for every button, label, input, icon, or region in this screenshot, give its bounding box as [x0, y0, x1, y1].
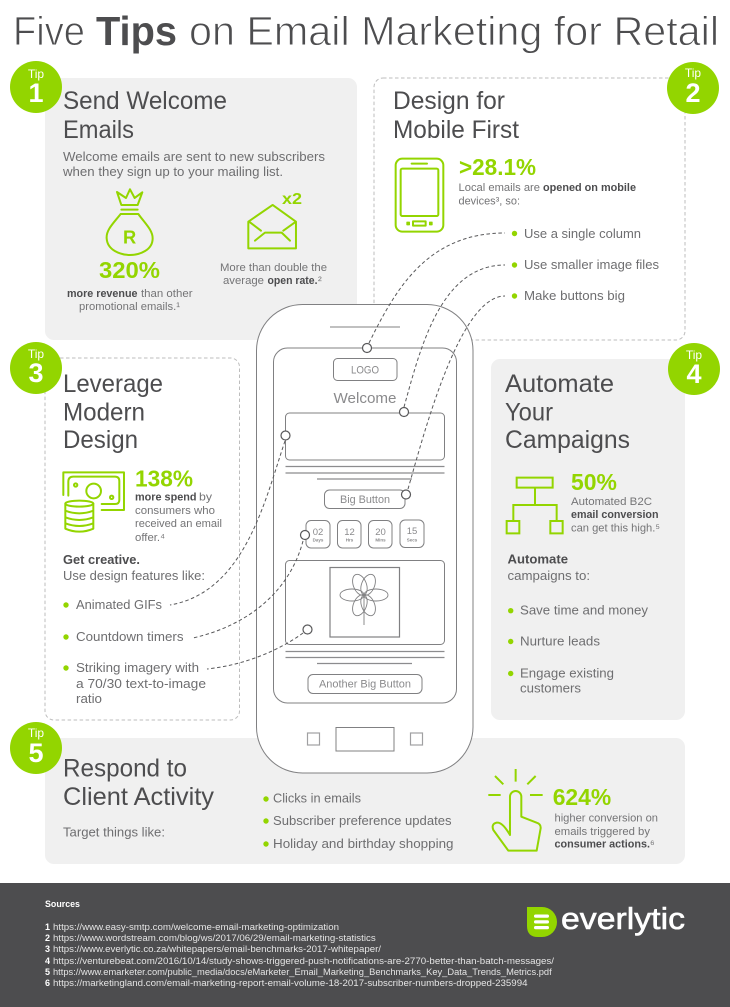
icon: money bag with crown: R	[123, 226, 136, 247]
list: client triggers	[263, 791, 454, 851]
badge: tip 3	[10, 342, 62, 394]
list: automation benefits: Save time and money	[520, 602, 649, 618]
list: automation benefits: Engage existing	[520, 666, 614, 681]
icon: open envelope x2	[248, 191, 302, 248]
sources list: https://marketingland.com/email-marketing-report-email-volume-18-2017-subscriber-numbers-dropped-235994	[53, 978, 528, 988]
list: mobile tips: Make buttons big	[524, 288, 625, 303]
sources list: 5	[45, 967, 50, 977]
text: opened on mobile: Local emails are	[458, 182, 540, 194]
list: mobile tips: Use smaller image files	[524, 257, 660, 272]
panel: tip 3 leverage modern design	[45, 358, 240, 720]
big button	[324, 490, 405, 508]
countdown timer: 02	[313, 527, 323, 538]
panel: tip 4 automate your campaigns	[491, 359, 685, 720]
text: email conversion: Automated B2C	[571, 496, 652, 508]
logo: everlytic	[527, 901, 685, 937]
text: more spend: by	[199, 492, 212, 504]
countdown timer: Secs	[407, 538, 418, 542]
icon: workflow chart	[507, 478, 563, 533]
icon: tapping hand	[488, 769, 543, 851]
heading: leverage modern design: Design	[63, 426, 138, 454]
list: design features: ratio	[76, 691, 102, 706]
text: opened on mobile	[458, 182, 636, 208]
list: client triggers: Clicks in emails	[273, 791, 361, 806]
stat: 624%: 624%	[553, 784, 611, 810]
badge: tip 2: Tip	[685, 66, 701, 80]
dashed connectors	[170, 233, 505, 669]
heading: design for mobile first: Mobile First	[393, 116, 519, 144]
countdown timer: Mins	[375, 538, 386, 542]
heading: respond to client activity: Client Activity	[63, 783, 214, 811]
sources list: 6	[45, 978, 50, 988]
heading: automate your campaigns: Automate	[505, 370, 614, 398]
text: more revenue: promotional emails.¹	[79, 301, 180, 313]
badge: tip 1: 1	[28, 78, 44, 108]
text: more spend: offer.⁴	[135, 532, 165, 544]
badge: tip 1	[10, 61, 62, 113]
image box with flower	[286, 560, 444, 644]
sources list: https://www.easy-smtp.com/welcome-email-marketing-optimization	[53, 922, 339, 932]
title: on Email Marketing for Retail	[189, 8, 719, 54]
badge: tip 4: Tip	[686, 348, 702, 362]
sources list: https://www.everlytic.co.za/whitepapers/email-benchmarks-2017-whitepaper/	[53, 944, 382, 954]
stat: 50%: 50%	[571, 469, 617, 495]
list: client triggers: Subscriber preference updates	[273, 813, 452, 828]
heading: automate your campaigns: Campaigns	[505, 426, 630, 454]
list: automation benefits: Nurture leads	[520, 634, 601, 648]
list: mobile tips	[512, 226, 660, 303]
sources list: 4	[45, 956, 50, 966]
list: mobile tips: Use a single column	[524, 226, 641, 241]
text: higher conversion: emails triggered by	[554, 826, 650, 838]
text: welcome description: Welcome emails are sent to new subscribers	[63, 149, 326, 164]
badge: tip 3: Tip	[28, 347, 44, 361]
countdown timer	[306, 520, 424, 548]
text: welcome description	[62, 149, 326, 179]
text: more revenue	[67, 288, 193, 313]
countdown timer: Hrs	[346, 538, 354, 542]
icon: money bag with crown	[107, 189, 153, 255]
hero image box	[286, 413, 444, 460]
text: more spend: more spend	[135, 492, 197, 504]
heading: respond to client activity: Respond to	[63, 755, 187, 783]
text: opened on mobile: opened on mobile	[543, 182, 636, 194]
welcome text: Welcome	[334, 390, 396, 407]
phone wireframe	[256, 304, 473, 773]
list: design features: Countdown timers	[76, 629, 184, 644]
text: more revenue: more revenue	[67, 288, 138, 300]
heading: design for mobile first	[393, 87, 519, 144]
badge: tip 2	[667, 62, 719, 114]
text: more spend	[135, 492, 222, 544]
text: get creative: Get creative.	[63, 552, 140, 567]
sources heading: Sources	[45, 899, 80, 909]
text: open rate: average	[223, 275, 264, 287]
text: more revenue: than other	[141, 288, 193, 300]
text: email conversion: email conversion	[571, 509, 659, 521]
logo box	[334, 358, 397, 380]
sources list: https://venturebeat.com/2016/10/14/study-shows-triggered-push-notifications-are-2770-better-than-batch-messages/	[53, 956, 555, 966]
list: client triggers: Holiday and birthday shopping	[273, 836, 454, 851]
sources list: https://www.wordstream.com/blog/ws/2017/06/29/email-marketing-statistics	[53, 933, 376, 943]
text: open rate: open rate.	[268, 275, 318, 287]
text: more spend: received an email	[135, 518, 222, 530]
panel: tip 2 design for mobile first	[374, 78, 685, 340]
text: opened on mobile: devices³, so:	[458, 196, 520, 208]
heading: send welcome emails: Emails	[63, 116, 134, 144]
list: automation benefits	[508, 602, 649, 696]
email screen	[274, 348, 456, 703]
badge: tip 5: 5	[28, 738, 44, 768]
text: email conversion	[571, 496, 660, 534]
text: open rate: ²	[318, 275, 322, 287]
countdown timer: Days	[313, 538, 324, 542]
heading: send welcome emails	[63, 87, 227, 144]
countdown timer: 12	[344, 527, 355, 538]
badge: tip 2: 2	[685, 78, 701, 108]
icon: banknote and coins	[63, 472, 124, 532]
phone home buttons	[308, 728, 422, 751]
heading: leverage modern design: Leverage	[63, 370, 163, 398]
list: design features: Striking imagery with	[76, 660, 199, 675]
badge: tip 3: 3	[28, 358, 44, 388]
heading: send welcome emails: Send Welcome	[63, 87, 227, 115]
heading: leverage modern design: Modern	[63, 398, 145, 426]
another big button: Another Big Button	[319, 678, 411, 690]
sources list: 2	[45, 933, 50, 943]
title: Tips	[96, 8, 177, 54]
text: open rate: More than double the	[220, 262, 327, 274]
heading: respond to client activity	[63, 755, 214, 811]
list: design features: Animated GIFs	[76, 597, 162, 612]
badge: tip 1: Tip	[28, 67, 44, 81]
list: design features	[63, 597, 206, 706]
big button: Big Button	[340, 494, 390, 506]
text: get creative: Use design features like:	[63, 568, 205, 583]
logo box: LOGO	[351, 364, 379, 376]
footer	[0, 883, 730, 1007]
text: welcome description: when they sign up to your mailing list.	[62, 164, 283, 179]
panel: tip 5 respond to client activity	[45, 738, 685, 864]
list: automation benefits: customers	[520, 681, 581, 696]
text: automate campaigns to	[508, 552, 590, 583]
heading: automate your campaigns: Your	[505, 398, 553, 426]
icon: open envelope x2: x2	[282, 191, 302, 208]
stat: 138%: 138%	[135, 466, 193, 492]
text: higher conversion: higher conversion on	[554, 813, 658, 825]
text: get creative	[63, 552, 205, 583]
another big button	[308, 674, 422, 694]
sources list: https://www.emarketer.com/public_media/docs/eMarketer_Email_Marketing_Benchmarks_Key_Data_Trends_Metrics.pdf	[53, 967, 552, 977]
badge: tip 5	[10, 722, 62, 774]
icon: smartphone	[396, 159, 443, 232]
countdown timer: 20	[375, 527, 386, 538]
text: email conversion: can get this high.⁵	[571, 522, 660, 534]
badge: tip 4: 4	[686, 359, 702, 389]
text: target things like: Target things like:	[63, 825, 165, 840]
text: higher conversion	[554, 813, 658, 851]
heading: design for mobile first: Design for	[393, 87, 505, 115]
logo: everlytic: everlytic	[561, 901, 685, 936]
badge: tip 4	[668, 343, 720, 395]
title: Five	[13, 8, 85, 54]
text: automate campaigns to: campaigns to:	[508, 568, 590, 583]
sources list: 1	[45, 922, 50, 932]
text: more spend: consumers who	[135, 505, 215, 517]
panel: tip 1 send welcome emails	[45, 78, 357, 340]
sources list	[45, 922, 555, 988]
text: higher conversion: consumer actions.	[554, 839, 650, 851]
text: automate campaigns to: Automate	[508, 552, 568, 566]
list: design features: a 70/30 text-to-image	[76, 676, 206, 691]
stat: 28.1%: >28.1%	[459, 154, 536, 180]
countdown timer: 15	[407, 526, 417, 537]
heading: automate your campaigns	[505, 370, 630, 454]
badge: tip 5: Tip	[28, 726, 44, 740]
sources list: 3	[45, 944, 50, 954]
stat: 320%: 320%	[99, 257, 160, 283]
heading: leverage modern design	[63, 370, 163, 454]
text: higher conversion: ⁶	[650, 839, 655, 851]
text: open rate	[220, 262, 327, 287]
